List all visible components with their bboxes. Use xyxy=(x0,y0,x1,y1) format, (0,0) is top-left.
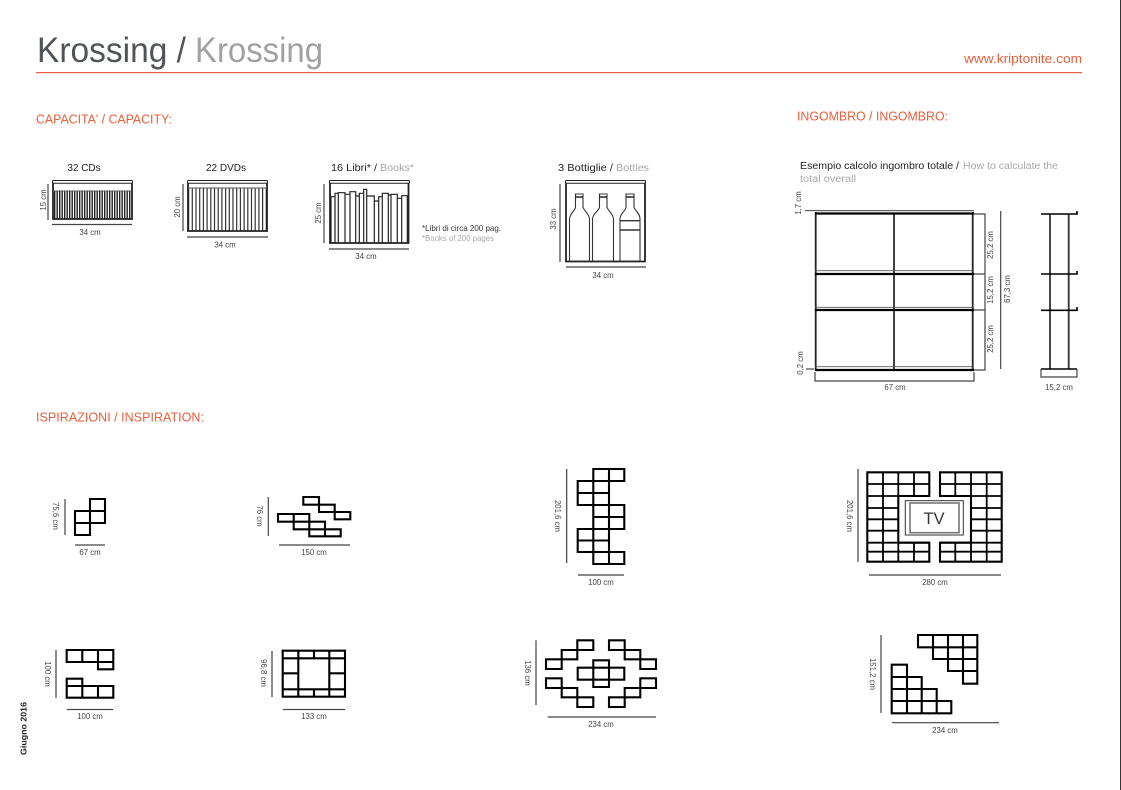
layout: 133 x 96,8 cm: 96,8 cm xyxy=(259,659,268,687)
layout: 67 x 75,6 cm: 67 cm xyxy=(79,548,101,557)
heading: capacity: CAPACITA' / CAPACITY: xyxy=(36,112,172,126)
layout: 100 x 201,6 cm: 201,6 cm xyxy=(553,500,562,532)
capacity: 16 books xyxy=(314,163,414,261)
panel: side view elevation xyxy=(1041,211,1077,392)
panel: front view elevation: 67,3 cm xyxy=(1003,275,1012,303)
panel: side view elevation: 15,2 cm xyxy=(1045,383,1073,392)
capacity: 16 books: Books* xyxy=(380,163,414,174)
header rule xyxy=(36,72,1082,73)
title xyxy=(37,31,323,70)
panel: front view elevation: 67 cm xyxy=(884,383,906,392)
text block: how to calculate: How to calculate the xyxy=(963,161,1058,172)
layout: 280 x 201,6 cm with TV: 280 cm xyxy=(922,578,948,587)
layout: 100 x 201,6 cm xyxy=(553,469,624,587)
capacity: 3 bottles: 3 Bottiglie / xyxy=(558,163,613,174)
layout: 67 x 75,6 cm xyxy=(51,499,105,557)
text block: how to calculate xyxy=(800,161,1058,185)
capacity: 22 DVDs xyxy=(173,163,268,250)
capacity: 32 CDs: 32 CDs xyxy=(67,163,101,174)
capacity: 32 CDs xyxy=(39,163,132,237)
panel: capacity diagrams xyxy=(39,163,649,280)
heading: inspiration: ISPIRAZIONI / INSPIRATION: xyxy=(36,410,204,424)
layout: 280 x 201,6 cm with TV: 201,6 cm xyxy=(845,500,854,532)
capacity: 16 books: 25 cm xyxy=(314,202,323,224)
footnote: books xyxy=(422,223,501,243)
layout: 100 x 100 cm: 100 cm xyxy=(43,661,52,687)
capacity: 16 books: 34 cm xyxy=(355,252,377,261)
layout: 234 x 151,2 cm: 234 cm xyxy=(932,726,958,735)
arrow: shelf offset xyxy=(806,368,814,370)
panel: front view elevation: 0,2 cm xyxy=(796,351,805,375)
capacity: 22 DVDs: 34 cm xyxy=(214,240,236,250)
icon: TV xyxy=(905,501,963,535)
text block: how to calculate: Esempio calcolo ingombro totale / xyxy=(800,161,959,172)
heading: overall dimensions: INGOMBRO / INGOMBRO: xyxy=(797,110,948,124)
layout: 133 x 96,8 cm: 133 cm xyxy=(301,712,327,721)
text block: how to calculate: total overall xyxy=(800,174,856,185)
layout: 100 x 100 cm xyxy=(43,650,113,721)
layout: 67 x 75,6 cm: 75,6 cm xyxy=(51,502,60,530)
layout: 150 x 76 cm: 150 cm xyxy=(301,548,327,557)
layout: 133 x 96,8 cm xyxy=(259,651,345,721)
panel: inspiration layouts xyxy=(43,469,1002,735)
panel: front view elevation: 1,7 cm xyxy=(794,191,803,215)
capacity: 3 bottles xyxy=(549,163,649,280)
title: Krossing xyxy=(195,31,323,70)
layout: 150 x 76 cm xyxy=(255,497,350,557)
icon: TV: TV xyxy=(923,510,945,528)
layout: 234 x 136 cm: 234 cm xyxy=(588,720,614,729)
layout: 234 x 151,2 cm: 151,2 cm xyxy=(868,658,877,690)
panel: front view elevation: 15,2 cm xyxy=(986,276,995,304)
capacity: 22 DVDs: 22 DVDs xyxy=(206,163,246,174)
capacity: 32 CDs: 34 cm xyxy=(79,228,101,237)
layout: 280 x 201,6 cm with TV xyxy=(845,469,1002,587)
capacity: 32 CDs: 15 cm xyxy=(39,189,48,211)
capacity: 3 bottles: 33 cm xyxy=(549,208,558,230)
layout: 234 x 136 cm xyxy=(523,640,656,729)
panel: front view elevation xyxy=(794,191,1012,392)
panel: front view elevation: 25,2 cm xyxy=(986,325,995,353)
capacity: 3 bottles: 34 cm xyxy=(592,271,614,280)
layout: 100 x 100 cm: 100 cm xyxy=(77,712,103,721)
footnote: books: *Libri di circa 200 pag. xyxy=(422,223,501,233)
panel: front view elevation: 25,2 cm xyxy=(986,231,995,259)
capacity: 16 books: 16 Libri* / xyxy=(331,163,377,174)
date label: Giugno 2016 xyxy=(18,702,28,755)
layout: 100 x 201,6 cm: 100 cm xyxy=(588,578,614,587)
website url: www.kriptonite.com xyxy=(963,52,1082,66)
layout: 234 x 151,2 cm xyxy=(868,635,999,735)
layout: 234 x 136 cm: 136 cm xyxy=(523,660,532,686)
layout: 150 x 76 cm: 76 cm xyxy=(255,505,264,527)
title: Krossing / xyxy=(37,31,186,70)
capacity: 3 bottles: Bottles xyxy=(616,163,649,174)
capacity: 22 DVDs: 20 cm xyxy=(173,196,182,218)
footnote: books: *Books of 200 pages xyxy=(422,233,494,243)
icon: bottles xyxy=(570,194,640,261)
